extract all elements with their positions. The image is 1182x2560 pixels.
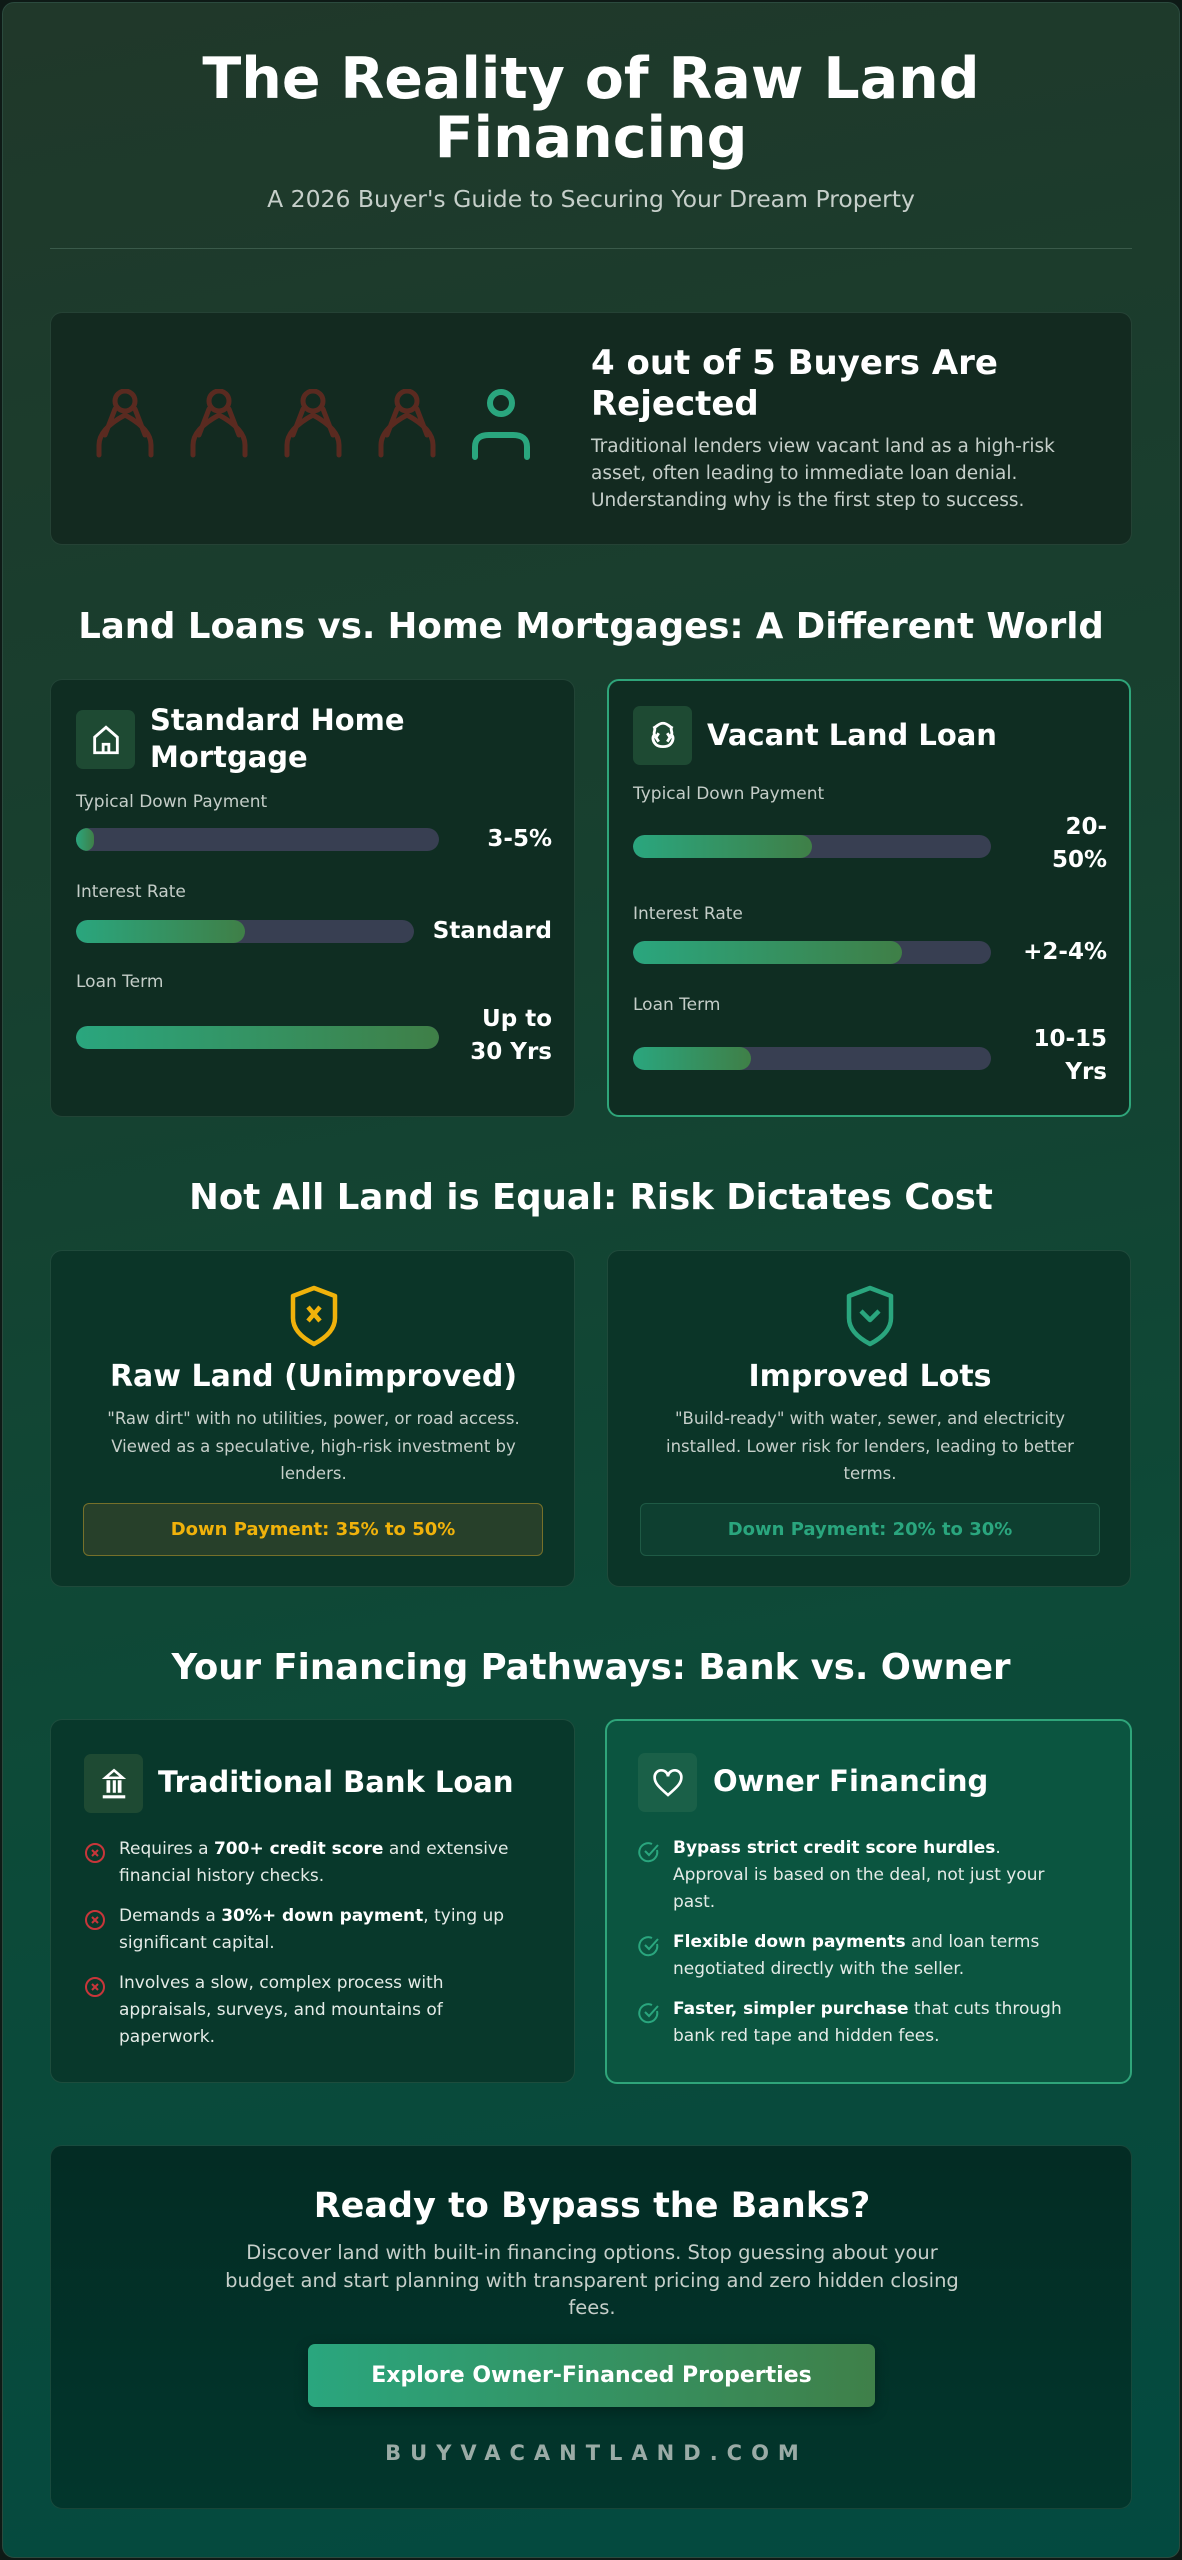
panel: bank loan	[50, 1719, 575, 2083]
title: The Reality of Raw Land	[202, 46, 980, 112]
description: "Raw dirt" with no utilities, power, or road access. Viewed as a speculative, high-risk investment by lenders.	[107, 1409, 520, 1483]
card title	[150, 703, 405, 774]
panel: vacant land loan: 10-15	[1033, 1026, 1107, 1052]
panel: standard home mortgage	[50, 679, 575, 1117]
card title: Standard Home	[150, 703, 405, 737]
panel: vacant land loan: +2-4%	[1023, 939, 1107, 965]
bar: loan term	[76, 1026, 439, 1049]
panel: standard home mortgage: 30 Yrs	[470, 1039, 552, 1065]
panel: standard home mortgage: Typical Down Payment	[76, 792, 267, 812]
list: bank drawbacks: Requires a 700+ credit score and extensive financial history checks.	[119, 1839, 508, 1886]
panel: call to action	[50, 2145, 1132, 2509]
badge: Down Payment: 20% to 30%	[728, 1519, 1012, 1540]
bar: loan term	[633, 1047, 991, 1070]
list: owner benefits: Approval is based on the deal, not just your past.	[673, 1865, 1045, 1912]
panel: vacant land loan: 50%	[1052, 847, 1107, 873]
stat heading: Rejected	[591, 384, 759, 424]
icon: people row	[96, 389, 530, 460]
bar: interest	[633, 941, 991, 964]
bar: down payment	[76, 828, 439, 851]
panel: vacant land loan: Yrs	[1065, 1059, 1107, 1085]
bar: down payment	[633, 835, 991, 858]
list: bank drawbacks: Demands a 30%+ down payment, tying up significant capital.	[119, 1906, 504, 1953]
stat heading	[591, 343, 998, 424]
panel: rejection stat	[50, 312, 1132, 545]
badge	[640, 1503, 1100, 1556]
list: owner benefits: Flexible down payments and loan terms negotiated directly with the seller.	[673, 1932, 1039, 1979]
title	[202, 46, 980, 171]
CTA text: Discover land with built-in financing options. Stop guessing about your budget and start planning with transparent pricing and zero hidden closing fees.	[225, 2241, 959, 2319]
stat text: Traditional lenders view vacant land as a high-risk asset, often leading to immediate loan denial. Understanding why is the first step to success.	[591, 436, 1055, 511]
panel: standard home mortgage: Loan Term	[76, 972, 163, 992]
subtitle: A 2026 Buyer's Guide to Securing Your Dream Property	[267, 185, 915, 213]
panel: improved lots	[607, 1250, 1131, 1587]
heading: risk: Not All Land is Equal: Risk Dictates Cost	[189, 1177, 993, 1218]
CTA heading: Ready to Bypass the Banks?	[314, 2186, 870, 2226]
badge: Down Payment: 35% to 50%	[171, 1519, 455, 1540]
panel: vacant land loan	[607, 679, 1131, 1117]
list: owner benefits: Bypass strict credit score hurdles.	[673, 1838, 1001, 1858]
panel: vacant land loan: Loan Term	[633, 995, 720, 1015]
heading: loans vs mortgages: Land Loans vs. Home Mortgages: A Different World	[78, 606, 1104, 647]
icon: bank	[84, 1754, 143, 1813]
stat heading: 4 out of 5 Buyers Are	[591, 343, 998, 383]
card title: Vacant Land Loan	[707, 718, 997, 752]
icon: shield x	[290, 1286, 338, 1346]
bar: interest	[76, 920, 414, 943]
icon: land	[633, 706, 692, 765]
panel: standard home mortgage: 3-5%	[487, 826, 552, 852]
panel: vacant land loan: 20-	[1065, 814, 1107, 840]
CTA button	[308, 2344, 875, 2407]
list: owner benefits	[638, 1838, 1062, 2046]
icon: shield check	[846, 1286, 894, 1346]
CTA button: Explore Owner-Financed Properties	[371, 2363, 812, 2388]
panel: owner financing	[605, 1719, 1132, 2084]
card title: Owner Financing	[713, 1764, 988, 1798]
panel: standard home mortgage: Up to	[482, 1006, 552, 1032]
panel: standard home mortgage: Interest Rate	[76, 882, 186, 902]
title: Financing	[435, 105, 747, 171]
card title: Improved Lots	[748, 1359, 992, 1394]
icon: house	[76, 710, 135, 769]
badge	[83, 1503, 543, 1556]
icon: heart	[638, 1753, 697, 1812]
list: owner benefits: Faster, simpler purchase that cuts through bank red tape and hidden fees.	[673, 1999, 1062, 2046]
card title: Mortgage	[150, 740, 308, 774]
panel: raw land	[50, 1250, 575, 1587]
description: "Build-ready" with water, sewer, and electricity installed. Lower risk for lenders, leading to better terms.	[666, 1409, 1074, 1483]
panel: vacant land loan: Typical Down Payment	[633, 784, 824, 804]
footer url: BUYVACANTLAND.COM	[385, 2441, 808, 2465]
card title: Traditional Bank Loan	[158, 1765, 513, 1799]
panel: vacant land loan: Interest Rate	[633, 904, 743, 924]
heading: pathways: Your Financing Pathways: Bank vs. Owner	[171, 1647, 1011, 1688]
card title: Raw Land (Unimproved)	[110, 1359, 517, 1394]
list: bank drawbacks	[85, 1839, 508, 2047]
panel: standard home mortgage: Standard	[433, 918, 552, 944]
list: bank drawbacks: Involves a slow, complex process with appraisals, surveys, and mountains of paperwork.	[119, 1973, 444, 2047]
